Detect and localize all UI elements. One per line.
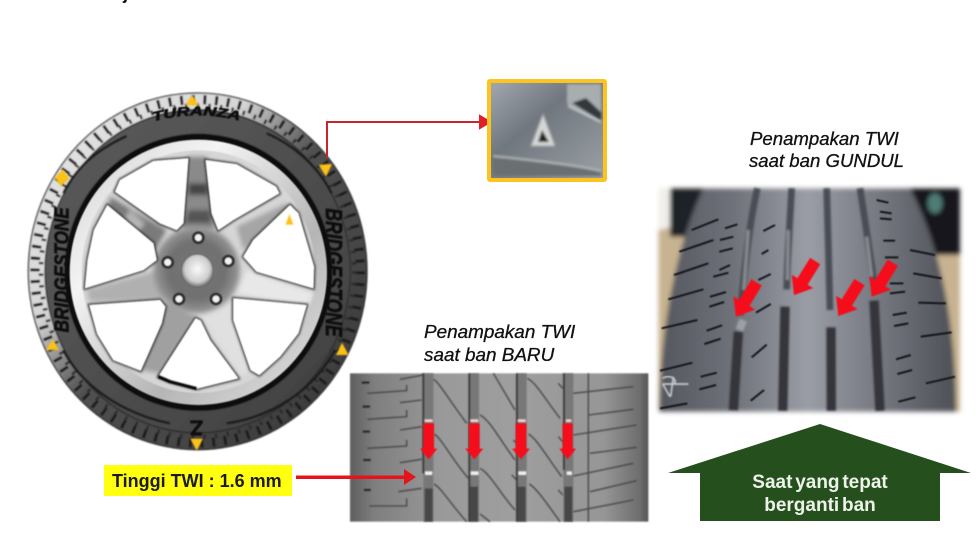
red pointer arrows [725, 254, 904, 323]
white wear indicator bars [425, 419, 572, 475]
sidewall lettering: BRIDGESTONE [51, 206, 74, 332]
callout: TWI height label: Tinggi TWI : 1.6 mm [112, 471, 282, 491]
grooves and tread lines [362, 373, 637, 522]
lug bolts [163, 233, 233, 304]
sidewall lettering [51, 106, 347, 440]
center bore [181, 254, 213, 287]
yellow TWI markers [46, 95, 349, 451]
tire with alloy wheel [26, 91, 369, 452]
tire body [28, 92, 368, 450]
sidewall lettering: Z [190, 416, 203, 440]
wheel openings [85, 158, 314, 389]
hub [153, 227, 240, 313]
heading: new tire [424, 322, 576, 366]
heading: worn tire: Penampakan TWI [750, 128, 899, 149]
photo: new tire with four red arrows [350, 373, 648, 522]
sidewall lettering: BRIDGESTONE [321, 208, 347, 338]
sipes [660, 200, 955, 408]
heading: new tire: saat ban BARU [424, 345, 555, 366]
groove lines with wear bars [733, 188, 880, 411]
alloy rim [70, 140, 327, 405]
heading: worn tire: saat ban GUNDUL [749, 150, 904, 171]
green up arrow callout: Saat yang tepat [752, 472, 888, 493]
spoke shading [87, 157, 313, 377]
photo: worn tire with four red arrows [658, 188, 960, 412]
chalk TWI mark [663, 377, 688, 397]
green up arrow callout: berganti ban [764, 495, 876, 516]
red connector arrow to inset [327, 116, 490, 158]
heading: worn tire [749, 128, 904, 171]
callout: TWI height label [104, 465, 292, 496]
heading: new tire: Penampakan TWI [424, 322, 576, 343]
red down arrows [420, 423, 576, 459]
inset: close-up of TWI triangle [489, 81, 605, 180]
green up arrow callout [668, 424, 971, 521]
sidewall lettering: TURANZA [152, 106, 240, 122]
red arrow from label to TWI [296, 469, 416, 485]
